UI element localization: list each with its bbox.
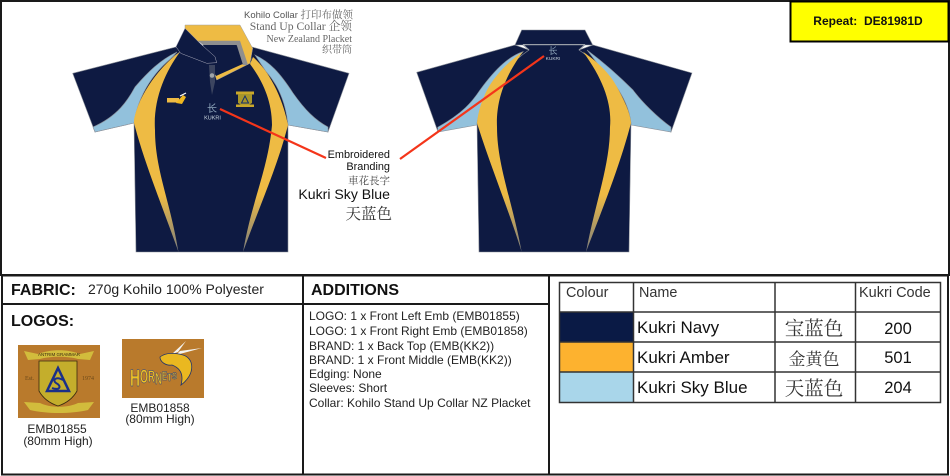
row: sky blue: Kukri Sky Blue bbox=[637, 378, 748, 397]
front sleeves bbox=[73, 47, 349, 132]
additions panel: LOGO: 1 x Front Right Emb (EMB01858) bbox=[309, 324, 528, 338]
logo captions: (80mm High) bbox=[23, 434, 93, 448]
front kukri brand bbox=[204, 103, 221, 122]
additions panel bbox=[309, 282, 531, 410]
row: sky blue bbox=[637, 378, 912, 400]
repeat code box bbox=[790, 2, 948, 42]
table header: Colour bbox=[566, 285, 609, 301]
collar note bbox=[244, 8, 353, 56]
logos heading: LOGOS: bbox=[11, 313, 74, 330]
row: amber bbox=[637, 348, 912, 369]
back kukri brand: 长 bbox=[548, 45, 558, 56]
embroidered branding callout: Branding bbox=[346, 161, 390, 173]
logo: EMB01858 hornets: E bbox=[162, 369, 167, 383]
table header: Kukri Code bbox=[859, 285, 931, 301]
logo: EMB01855 crest: 1974 bbox=[82, 376, 94, 382]
table grid bbox=[560, 282, 940, 402]
back kukri brand bbox=[546, 45, 560, 62]
row: amber: Kukri Amber bbox=[637, 348, 730, 367]
row: sky blue: 天蓝色 bbox=[785, 378, 843, 400]
embroidered branding callout bbox=[298, 149, 392, 223]
logo: EMB01855 crest: Est. bbox=[25, 376, 35, 382]
callout lines bbox=[220, 56, 544, 159]
back collar bbox=[515, 30, 593, 45]
row: sky blue: 204 bbox=[884, 379, 912, 397]
collar note: New Zealand Placket bbox=[266, 34, 352, 45]
additions panel: BRAND: 1 x Back Top (EMB(KK2)) bbox=[309, 339, 494, 353]
table header: Name bbox=[639, 285, 677, 301]
row: amber: 501 bbox=[884, 349, 912, 367]
row: amber: 金黄色 bbox=[788, 350, 840, 369]
logo captions bbox=[23, 401, 195, 448]
collar note: 织带筒 bbox=[322, 43, 352, 56]
logo captions: EMB01855 bbox=[27, 422, 87, 436]
row: navy bbox=[637, 318, 912, 340]
repeat code box: Repeat: DE81981D bbox=[813, 14, 923, 28]
embroidered branding callout: 車花長字 bbox=[348, 174, 390, 187]
table header bbox=[566, 285, 931, 301]
colour swatches bbox=[560, 312, 633, 402]
logo: EMB01858 hornets: H bbox=[130, 365, 140, 392]
fabric row: 270g Kohilo 100% Polyester bbox=[88, 281, 264, 297]
colour table bbox=[560, 282, 940, 402]
row: navy: Kukri Navy bbox=[637, 318, 720, 337]
additions panel: Edging: None bbox=[309, 367, 382, 381]
back kukri brand: KUKRI bbox=[546, 56, 560, 62]
stand up collar bbox=[176, 25, 253, 95]
additions panel: BRAND: 1 x Front Middle (EMB(KK2)) bbox=[309, 353, 512, 367]
row: navy: 宝蓝色 bbox=[785, 318, 843, 340]
logo: EMB01855 crest bbox=[18, 345, 100, 418]
back shirt bbox=[417, 30, 692, 252]
front body bbox=[134, 52, 288, 252]
collar note: Kohilo Collar 打印布做领 bbox=[244, 8, 353, 21]
additions panel: ADDITIONS bbox=[311, 282, 399, 299]
back amber panels bbox=[477, 52, 631, 252]
logo: EMB01858 hornets bbox=[122, 339, 204, 398]
logo: EMB01855 crest: ANTRIM GRAMMAR bbox=[38, 352, 81, 357]
front crest badge bbox=[236, 92, 254, 107]
logo: EMB01858 hornets: O bbox=[140, 367, 148, 388]
additions panel: Sleeves: Short bbox=[309, 381, 388, 395]
logo: EMB01858 hornets: N bbox=[155, 371, 162, 388]
back body bbox=[477, 45, 631, 252]
logo captions: EMB01858 bbox=[130, 401, 190, 415]
collar note: Stand Up Collar 企领 bbox=[250, 19, 352, 33]
front amber panels bbox=[134, 52, 288, 252]
embroidered branding callout: Kukri Sky Blue bbox=[298, 186, 390, 202]
embroidered branding callout: 天蓝色 bbox=[345, 204, 392, 223]
additions panel: LOGO: 1 x Front Left Emb (EMB01855) bbox=[309, 309, 520, 323]
logo: EMB01858 hornets: S bbox=[172, 371, 177, 381]
fabric row: FABRIC: bbox=[11, 282, 76, 299]
logo: EMB01858 hornets: T bbox=[167, 372, 172, 384]
front shirt bbox=[73, 25, 349, 252]
logo captions: (80mm High) bbox=[125, 412, 195, 426]
back sleeves bbox=[417, 45, 692, 132]
fabric row bbox=[11, 281, 264, 299]
logo: EMB01858 hornets: R bbox=[148, 367, 155, 386]
additions panel: Collar: Kohilo Stand Up Collar NZ Placket bbox=[309, 396, 531, 410]
front hornet badge bbox=[167, 93, 186, 104]
row: navy: 200 bbox=[884, 320, 912, 338]
front kukri brand: 长 bbox=[207, 103, 217, 115]
front kukri brand: KUKRI bbox=[204, 116, 221, 122]
embroidered branding callout: Embroidered bbox=[328, 149, 390, 161]
